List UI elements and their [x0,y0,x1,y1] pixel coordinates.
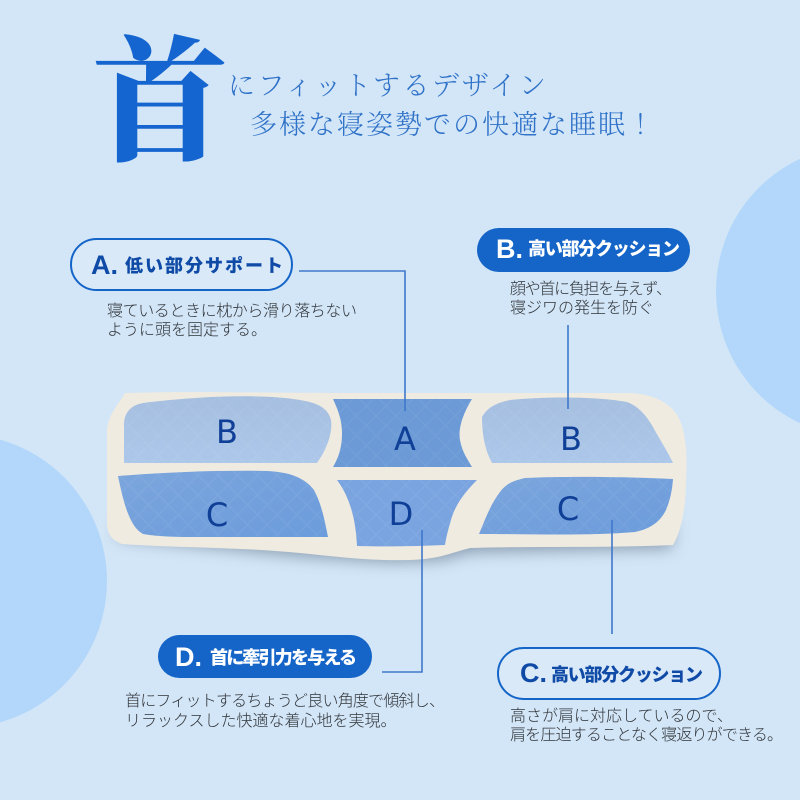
zone D [337,480,477,546]
callout C text: 肩を圧迫することなく寝返りができる。 [510,726,783,744]
zone B right [482,398,673,463]
callout D heading: 首に牽引力を与える [210,647,357,668]
callout C heading: 高い部分クッション [551,664,703,685]
zone D: D [389,495,413,533]
zone B right: B [560,420,582,458]
callout C heading: C. [520,658,547,688]
callout A text: ように頭を固定する。 [107,321,267,339]
callout B text: 顔や首に負担を与えず、 [510,280,672,298]
callout D text: リラックスした快適な着心地を実現。 [125,712,397,730]
zone C left [118,471,328,537]
callout D heading: D. [175,642,202,672]
zone A: A [394,420,416,458]
pillow shadow [118,518,672,562]
callout B pill [477,228,690,272]
callout D [125,635,445,730]
pillow body [107,392,687,560]
callout B heading: 高い部分クッション [528,238,680,259]
callout A heading: A. [91,250,118,280]
connector C [611,520,613,634]
callout A text: 寝ているときに枕から滑り落ちない [107,302,357,320]
zone C right [479,477,673,534]
title [92,0,654,189]
callout D text: 首にフィットするちょうど良い角度で傾斜し、 [125,692,445,710]
zone A [333,399,472,467]
zone C left: C [206,496,228,534]
callout A pill [71,239,292,290]
callout B text: 寝ジワの発生を防ぐ [510,299,654,317]
connector A [299,271,405,411]
decorative circle right [716,145,800,437]
subtitle line 2: 多様な寝姿勢での快適な睡眠！ [250,110,654,140]
callout C pill [498,648,720,699]
zone B left [124,396,331,463]
callout B [477,228,690,317]
callout C [498,648,783,744]
pillow illustration [107,392,687,562]
zone B left: B [216,413,238,451]
callout C text: 高さが肩に対応しているので、 [510,707,733,725]
zone C right: C [557,490,579,528]
subtitle line 1: にフィットするデザイン [228,71,546,101]
callout A heading: 低い部分サポート [125,255,283,276]
connector B [567,325,569,409]
callout B heading: B. [496,234,523,264]
connector D [382,530,422,672]
decorative circle left [0,434,107,728]
callout A [71,239,357,339]
callout D pill [158,635,372,678]
